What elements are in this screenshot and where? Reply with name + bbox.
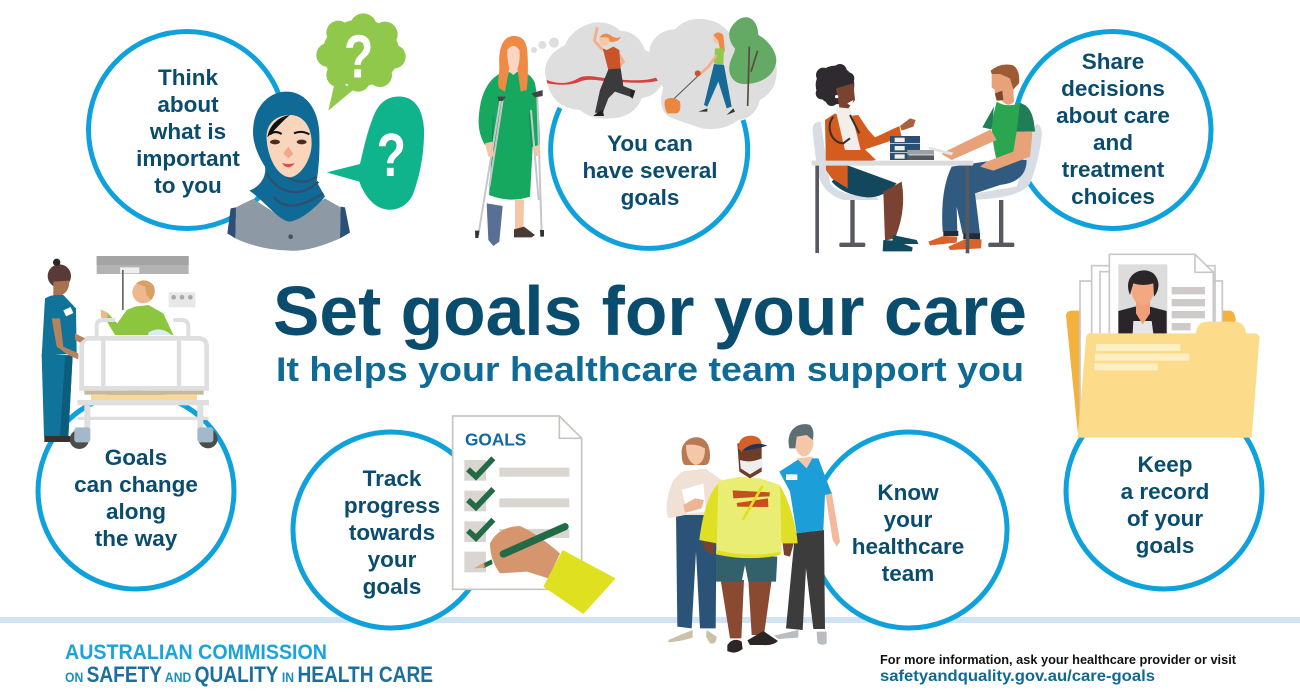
illustration: doctor and patient at a table — [812, 64, 1042, 253]
text: think about what is important to you: about — [157, 92, 219, 117]
illustration: woman in hijab with question bubbles — [227, 13, 424, 251]
text: track progress towards your goals: Track — [363, 466, 422, 491]
text: footer information: safetyandquality.gov.au/care-goals — [880, 668, 1155, 685]
icon: hospital bed — [70, 320, 218, 449]
text: keep a record of your goals: goals — [1136, 533, 1194, 558]
icon: paper records — [1080, 254, 1222, 428]
icon: thought bubble dots — [531, 38, 559, 53]
figure: man with cap — [699, 436, 798, 653]
text: think about what is important to you: important — [136, 146, 240, 171]
figure: woman with crutches — [475, 36, 544, 246]
illustration: healthcare team of three people — [667, 424, 840, 653]
text: goals can change along the way: Goals — [105, 445, 167, 470]
text: share decisions about care and treatment choices: choices — [1071, 184, 1155, 209]
text: footer information: For more information, ask your healthcare provider or visit — [880, 653, 1237, 667]
text: share decisions about care and treatment choices: Share — [1082, 49, 1144, 74]
text: know your healthcare team: Know — [877, 480, 939, 505]
text: know your healthcare team: healthcare — [852, 534, 964, 559]
figure: nurse — [42, 259, 85, 442]
heading: subtitle: It helps your healthcare team support you — [276, 351, 1024, 389]
panel: you can have several goals — [551, 108, 748, 248]
icon: thought cloud runner — [545, 22, 663, 119]
icon: table — [812, 161, 973, 253]
figure: woman — [227, 92, 350, 251]
icon: folder back — [1066, 311, 1236, 438]
text: share decisions about care and treatment choices: decisions — [1061, 76, 1165, 101]
text: track progress towards your goals: goals — [363, 574, 421, 599]
text: know your healthcare team: team — [882, 561, 934, 586]
text: share decisions about care and treatment choices: treatment — [1062, 157, 1165, 182]
illustration: nurse and patient in hospital bed — [42, 256, 218, 449]
heading: main title — [273, 272, 1027, 389]
text: keep a record of your goals: a record — [1121, 479, 1209, 504]
text: share decisions about care and treatment choices: and — [1093, 130, 1133, 155]
heading: main title: Set goals for your care — [273, 272, 1027, 350]
icon: thought cloud dog walker — [649, 17, 777, 129]
figure: patient — [928, 64, 1035, 250]
icon: wall monitor — [97, 256, 195, 310]
figure: doctor — [816, 64, 918, 251]
text: share decisions about care and treatment choices: about care — [1056, 103, 1170, 128]
text: think about what is important to you: what is — [149, 119, 226, 144]
text: you can have several goals: have several — [582, 158, 718, 183]
panel: goals can change — [38, 393, 234, 589]
text: think about what is important to you: Think — [158, 65, 218, 90]
icon: green question bubble — [316, 13, 406, 111]
illustration: folder with personal records — [1066, 254, 1260, 438]
text: goals can change along the way: the way — [95, 526, 178, 551]
icon: writing hand — [474, 526, 616, 614]
illustration: goals checklist with writing hand — [453, 416, 616, 614]
figure: patient — [101, 280, 173, 335]
text: keep a record of your goals: Keep — [1137, 452, 1193, 477]
logo: Australian Commission on Safety and Quality in Health Care — [65, 641, 433, 687]
figure: man in scrubs — [774, 424, 840, 645]
panel: think about what is important — [88, 32, 286, 228]
icon: teal question bubble — [327, 97, 424, 210]
text: think about what is important to you: to you — [154, 173, 222, 198]
text: goals can change along the way: along — [106, 499, 166, 524]
text: know your healthcare team: your — [884, 507, 933, 532]
illustration: woman on crutches imagining goals — [475, 17, 777, 246]
panel: share decisions — [1014, 32, 1211, 228]
icon: checklist paper: GOALS — [465, 429, 526, 449]
icon: teal question bubble: ? — [377, 121, 406, 190]
text: you can have several goals: You can — [607, 131, 693, 156]
icon: chairs — [813, 122, 1042, 247]
logo: Australian Commission on Safety and Quality in Health Care: ON SAFETY AND QUALITY IN HEALTH CARE — [65, 662, 433, 687]
panel: know your healthcare team — [811, 432, 1007, 628]
icon: books and tablet — [890, 136, 953, 160]
text: goals can change along the way: can change — [74, 472, 198, 497]
panel: keep a record — [1066, 393, 1262, 589]
icon: checklist paper — [453, 416, 582, 589]
text: keep a record of your goals: of your — [1127, 506, 1203, 531]
panel: track progress — [293, 432, 489, 628]
icon: green question bubble: ? — [344, 23, 373, 92]
text: you can have several goals: goals — [621, 185, 679, 210]
text: track progress towards your goals: progress — [344, 493, 440, 518]
text: track progress towards your goals: your — [368, 547, 417, 572]
logo: Australian Commission on Safety and Quality in Health Care: AUSTRALIAN COMMISSION — [65, 641, 327, 664]
figure: woman with tablet — [667, 437, 722, 644]
text: footer information — [880, 653, 1237, 685]
icon: folder front — [1078, 322, 1260, 438]
text: track progress towards your goals: towards — [349, 520, 435, 545]
